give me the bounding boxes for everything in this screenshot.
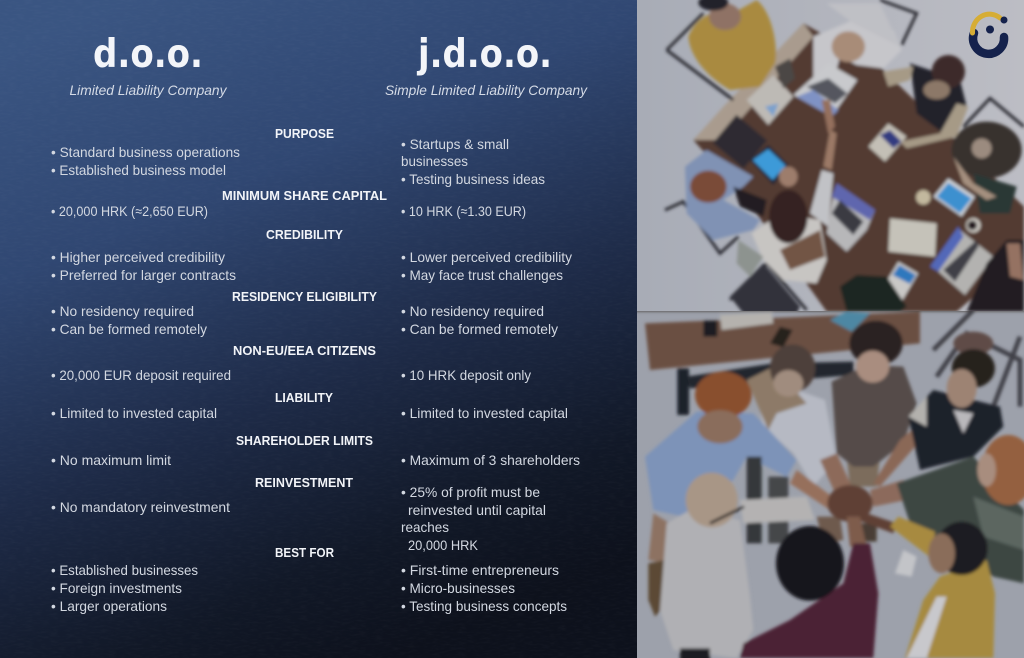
text: d.o.o. credibility: • Preferred for larger contracts (51, 267, 236, 283)
text: j.d.o.o. deposit: • 10 HRK deposit only (401, 367, 531, 383)
text: d.o.o. residency (51, 303, 207, 337)
text: d.o.o. credibility: • Higher perceived credibility (51, 249, 225, 265)
text: d.o.o. residency: • Can be formed remotely (51, 321, 207, 337)
heading: non-EU/EEA citizens: NON-EU/EEA CITIZENS (233, 343, 376, 358)
text: j.d.o.o. reinvestment: reaches (401, 519, 449, 535)
row: reinvestment (51, 475, 546, 553)
text: j.d.o.o. credibility: • Lower perceived credibility (401, 249, 572, 265)
text: j.d.o.o. reinvestment: 20,000 HRK (408, 537, 479, 553)
column header: d.o.o. (70, 32, 227, 98)
heading: purpose: PURPOSE (275, 126, 334, 141)
text: d.o.o. capital: • 20,000 HRK (≈2,650 EUR) (51, 203, 208, 219)
row: purpose (51, 126, 545, 187)
photo: team stacking hands in a circle (633, 307, 1024, 658)
text: j.d.o.o. best for: • First-time entrepreneurs (401, 562, 559, 578)
text: d.o.o. purpose: • Established business model (51, 162, 226, 178)
text: d.o.o. deposit: • 20,000 EUR deposit required (51, 367, 231, 383)
panel: comparison background (0, 0, 637, 658)
row: minimum share capital (51, 188, 526, 219)
text: j.d.o.o. reinvestment (401, 484, 546, 553)
title: d.o.o.: d.o.o. (93, 32, 203, 77)
subtitle: Limited Liability Company: Limited Liability Company (70, 82, 227, 98)
text: d.o.o. best for: • Foreign investments (51, 580, 182, 596)
row: shareholder limits (51, 433, 580, 468)
text: d.o.o. credibility (51, 249, 236, 283)
text: d.o.o. purpose: • Standard business operations (51, 144, 240, 160)
text: j.d.o.o. credibility (401, 249, 572, 283)
text: j.d.o.o. residency: • No residency required (401, 303, 544, 319)
text: j.d.o.o. best for: • Micro-businesses (401, 580, 515, 596)
title: j.d.o.o.: j.d.o.o. (416, 32, 552, 77)
heading: liability: LIABILITY (275, 390, 333, 405)
row: credibility (51, 227, 572, 283)
text: j.d.o.o. reinvestment: reinvested until capital (408, 502, 546, 518)
row: liability (51, 390, 568, 421)
text: j.d.o.o. residency (401, 303, 558, 337)
text: j.d.o.o. purpose: • Startups & small (401, 136, 509, 152)
text: d.o.o. best for (51, 562, 198, 614)
photo: team meeting around a table, seen from above (637, 0, 1024, 313)
heading: residency eligibility: RESIDENCY ELIGIBILITY (232, 289, 377, 304)
text: d.o.o. shareholders: • No maximum limit (51, 452, 171, 468)
text: d.o.o. best for: • Established businesses (51, 562, 198, 578)
text: d.o.o. best for: • Larger operations (51, 598, 167, 614)
text: j.d.o.o. purpose: businesses (401, 153, 468, 169)
heading: best for: BEST FOR (275, 545, 335, 560)
text: j.d.o.o. shareholders: • Maximum of 3 shareholders (401, 452, 580, 468)
text: d.o.o. purpose (51, 144, 240, 178)
column header: j.d.o.o. (385, 32, 588, 98)
row: best for (51, 545, 567, 614)
text: j.d.o.o. credibility: • May face trust challenges (401, 267, 563, 283)
text: j.d.o.o. liability: • Limited to invested capital (401, 405, 568, 421)
text: d.o.o. residency: • No residency required (51, 303, 194, 319)
subtitle: Simple Limited Liability Company: Simple Limited Liability Company (385, 82, 588, 98)
icon: company logo (972, 14, 1008, 54)
text: j.d.o.o. purpose (401, 136, 545, 187)
row: residency eligibility (51, 289, 558, 337)
heading: credibility: CREDIBILITY (266, 227, 343, 242)
text: j.d.o.o. purpose: • Testing business ideas (401, 171, 545, 187)
heading: reinvestment: REINVESTMENT (255, 475, 353, 490)
text: j.d.o.o. reinvestment: • 25% of profit must be (401, 484, 540, 500)
heading: minimum share capital: MINIMUM SHARE CAPITAL (222, 188, 387, 203)
text: j.d.o.o. best for (401, 562, 567, 614)
text: j.d.o.o. best for: • Testing business concepts (401, 598, 567, 614)
row: non-EU/EEA citizens (51, 343, 531, 383)
text: j.d.o.o. residency: • Can be formed remotely (401, 321, 558, 337)
text: j.d.o.o. capital: • 10 HRK (≈1.30 EUR) (401, 203, 526, 219)
heading: shareholder limits: SHAREHOLDER LIMITS (236, 433, 373, 448)
text: d.o.o. liability: • Limited to invested capital (51, 405, 217, 421)
text: d.o.o. reinvestment: • No mandatory reinvestment (51, 499, 230, 515)
